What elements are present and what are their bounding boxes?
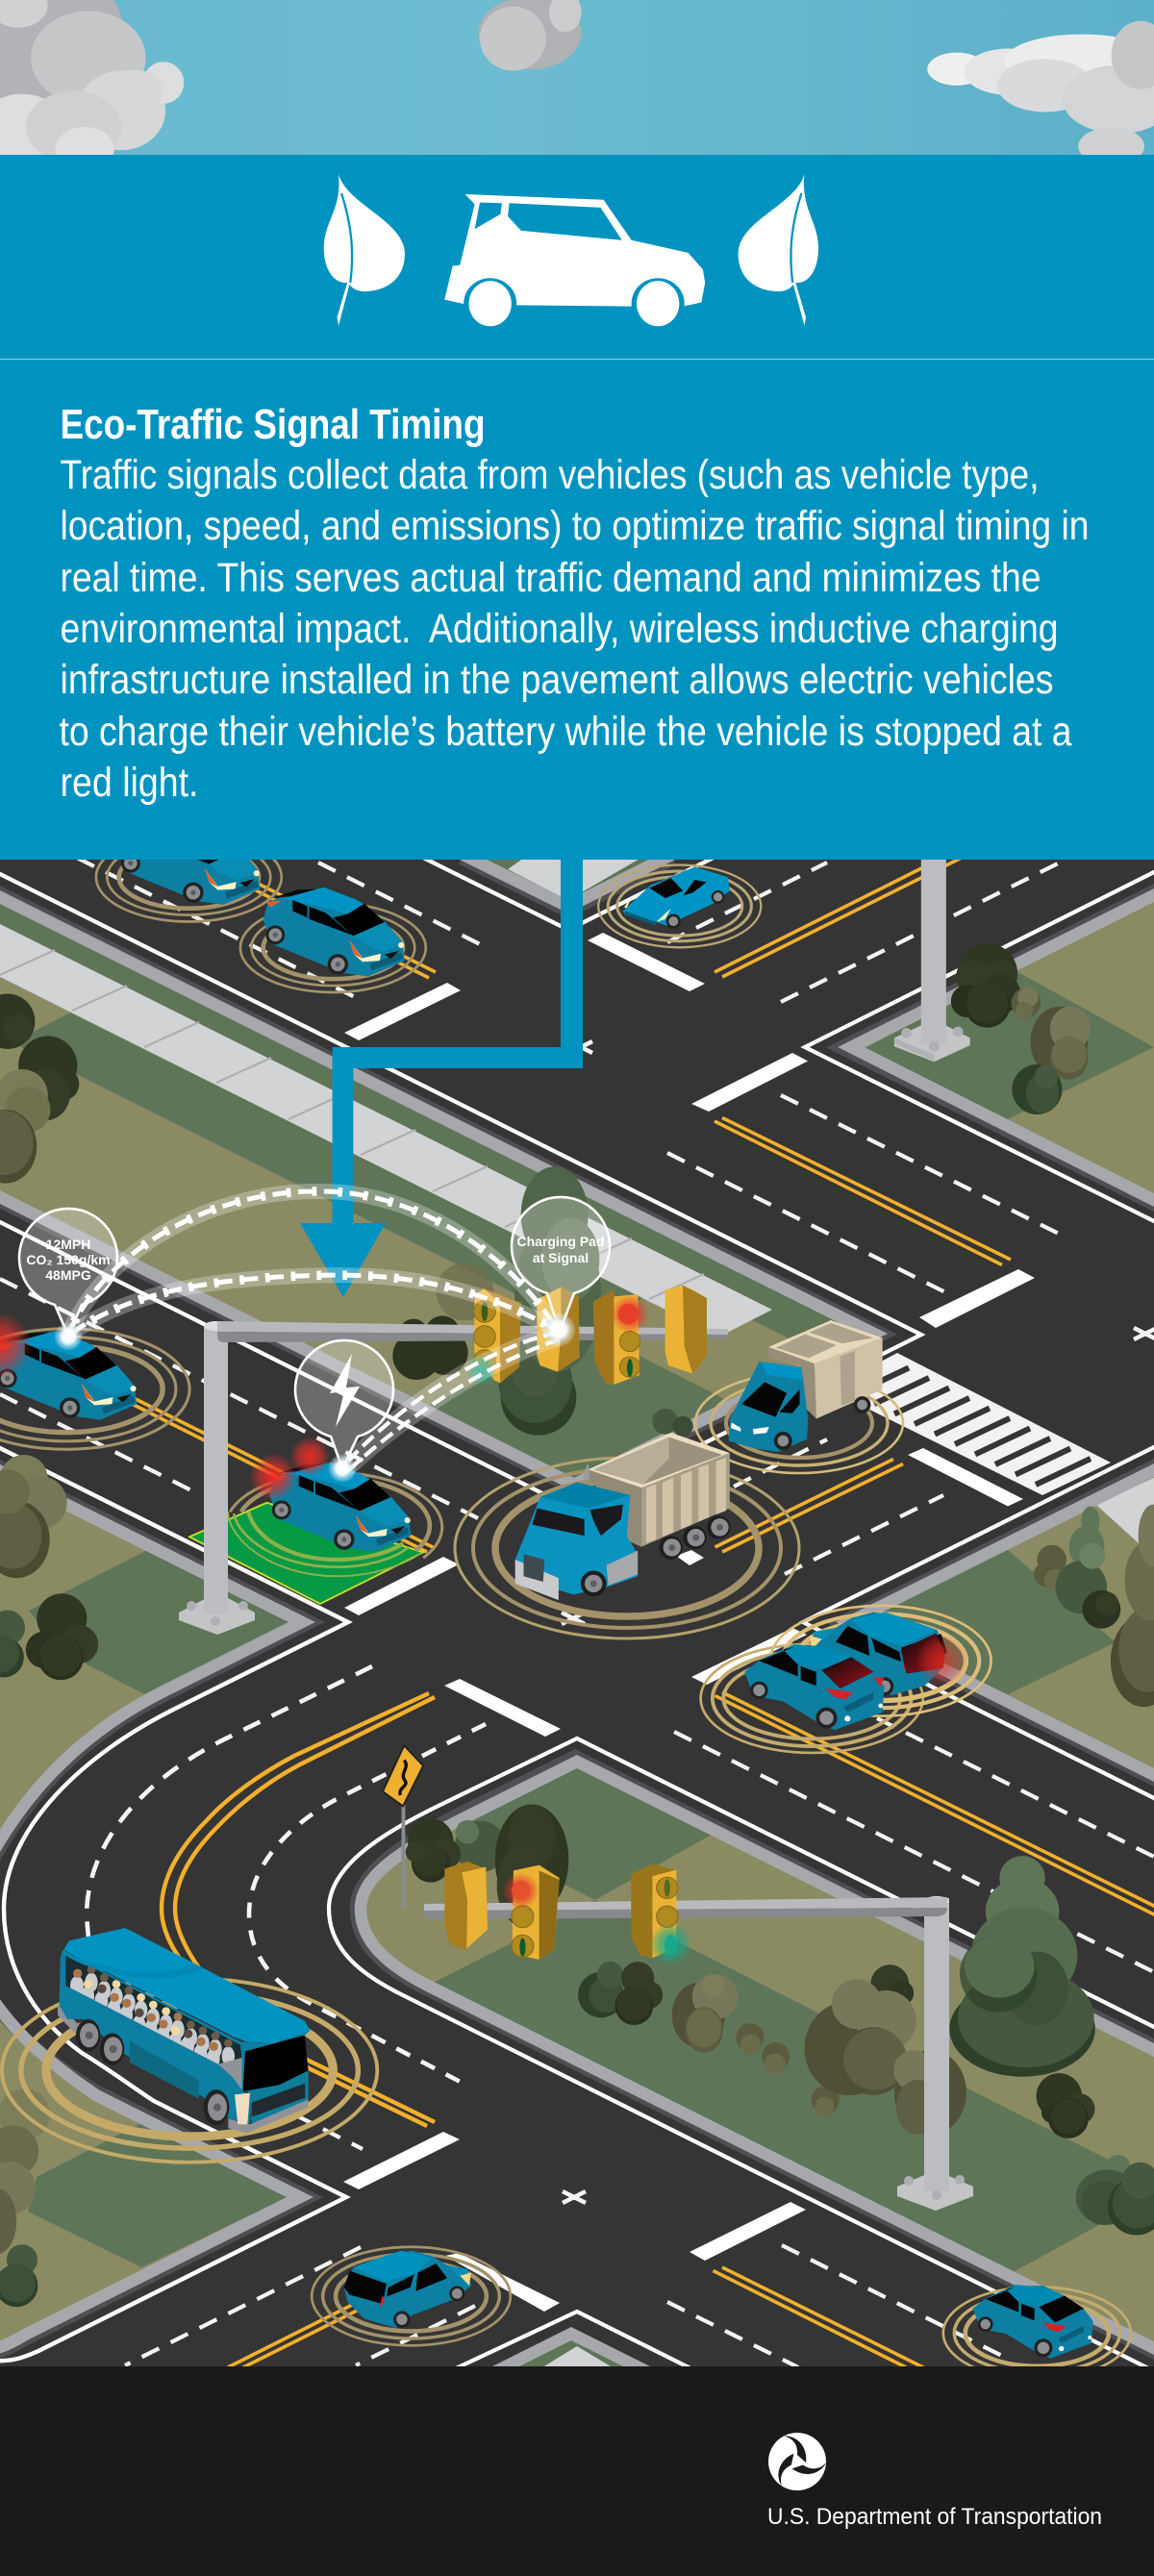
traffic signal: upper arm, red: [593, 1290, 649, 1385]
car: reporting 12MPH: [0, 1313, 137, 1420]
traffic signal: lower arm, red: [502, 1865, 560, 1960]
block C: lower left corner: [0, 1977, 310, 2357]
signal transmission nodes: [54, 1313, 576, 1483]
charging pad: [189, 1503, 423, 1604]
box truck: [729, 1320, 883, 1452]
trees: left upper cluster: [0, 994, 79, 1184]
block H: left corner: [0, 1443, 348, 2361]
asphalt: [0, 856, 1154, 2370]
bubble: vehicle data: 48MPG: [45, 1267, 91, 1283]
bus: [58, 1928, 311, 2133]
heading: Eco-Traffic Signal Timing: [60, 401, 485, 448]
car: top cut off: [118, 815, 261, 905]
traffic signal: upper arm, first: [465, 1288, 521, 1387]
traffic signal: upper arm, back: [665, 1286, 707, 1373]
car: upper road: [263, 888, 405, 977]
bubble: charging pad at signal: [512, 1197, 610, 1332]
pole and base: upper right: [894, 856, 970, 1062]
trees: block B top: [406, 1805, 568, 1926]
mast arm pole: left: [179, 1321, 728, 1635]
block F: right corner: [803, 1442, 1154, 1803]
bubble: charging pad at signal: at Signal: [533, 1250, 589, 1265]
logo: USDOT triskelion: [768, 2433, 826, 2490]
bubble: vehicle data: [19, 1209, 117, 1336]
traffic signal: upper arm, second: [537, 1287, 580, 1372]
block A: sidewalk median: [0, 869, 921, 1509]
icon: car: [444, 194, 705, 329]
car: blue sports car: [623, 866, 730, 929]
block D: upper right corner: [805, 867, 1154, 1226]
double yellow center lines: [130, 848, 1154, 2367]
block I: bottom corner: [452, 2312, 702, 2389]
car: on charging pad: [249, 1437, 411, 1552]
trees: block B middle: [578, 1962, 966, 2135]
body text: [60, 452, 1089, 806]
car: rear stopped car: [810, 1612, 967, 1695]
trees: right side of block F: [1034, 1505, 1154, 1707]
bubble: vehicle data: 12MPH: [46, 1237, 90, 1252]
curve warning sign: [383, 1745, 423, 1910]
stop bars: [343, 933, 1035, 2312]
bubble: charging pad at signal: Charging Pad: [516, 1234, 605, 1249]
signal rings: [0, 833, 1131, 2380]
block E: top corner: [414, 852, 725, 930]
lane dashes: [0, 844, 1154, 2367]
icon: left leaf: [324, 174, 405, 326]
data exchange arcs: [68, 1191, 560, 1471]
arc: signal to vehicle: [68, 1275, 558, 1336]
trees: upper right corner: [951, 943, 1091, 1114]
arc: signal and charging car: [340, 1333, 560, 1471]
arc: vehicle to signal: [68, 1191, 558, 1335]
sky with clouds: [0, 0, 1154, 171]
icon: right leaf: [739, 174, 818, 326]
car: bottom center: [344, 2251, 471, 2328]
blue information panel: [0, 155, 1154, 860]
body text: red light.: [60, 760, 198, 806]
clouds: [0, 0, 1154, 171]
trees: lower right: [1037, 2073, 1154, 2236]
traffic signal: lower arm, back: [444, 1862, 488, 1950]
intersection center marks: [562, 1041, 1154, 2203]
trees: left middle: [0, 1455, 98, 1680]
bubble: vehicle data: CO₂ 150g/km: [26, 1252, 111, 1267]
trees: lower left: [0, 2088, 50, 2307]
illustrated intersection scene: [0, 815, 1154, 2389]
traffic signal: lower arm, green: [631, 1864, 692, 1965]
mast arm pole: lower right: [424, 1896, 973, 2211]
car: bottom right: [973, 2285, 1093, 2359]
trees: behind mast arm: [392, 1166, 693, 1437]
footer bar: [0, 2366, 1154, 2576]
department name: U.S. Department of Transportation: [767, 2504, 1102, 2530]
bubble: lightning bolt: [295, 1340, 393, 1468]
block B: hairpin median: [329, 1738, 1154, 2376]
crosswalk: [829, 1353, 1111, 1495]
dump truck: [515, 1433, 731, 1600]
divider line: [0, 359, 1154, 360]
blue connector arrow: [300, 856, 583, 1297]
tall green tree lower right: [949, 1856, 1095, 2077]
car: front stopped car: [744, 1644, 885, 1730]
bus passengers: [70, 1965, 235, 2068]
